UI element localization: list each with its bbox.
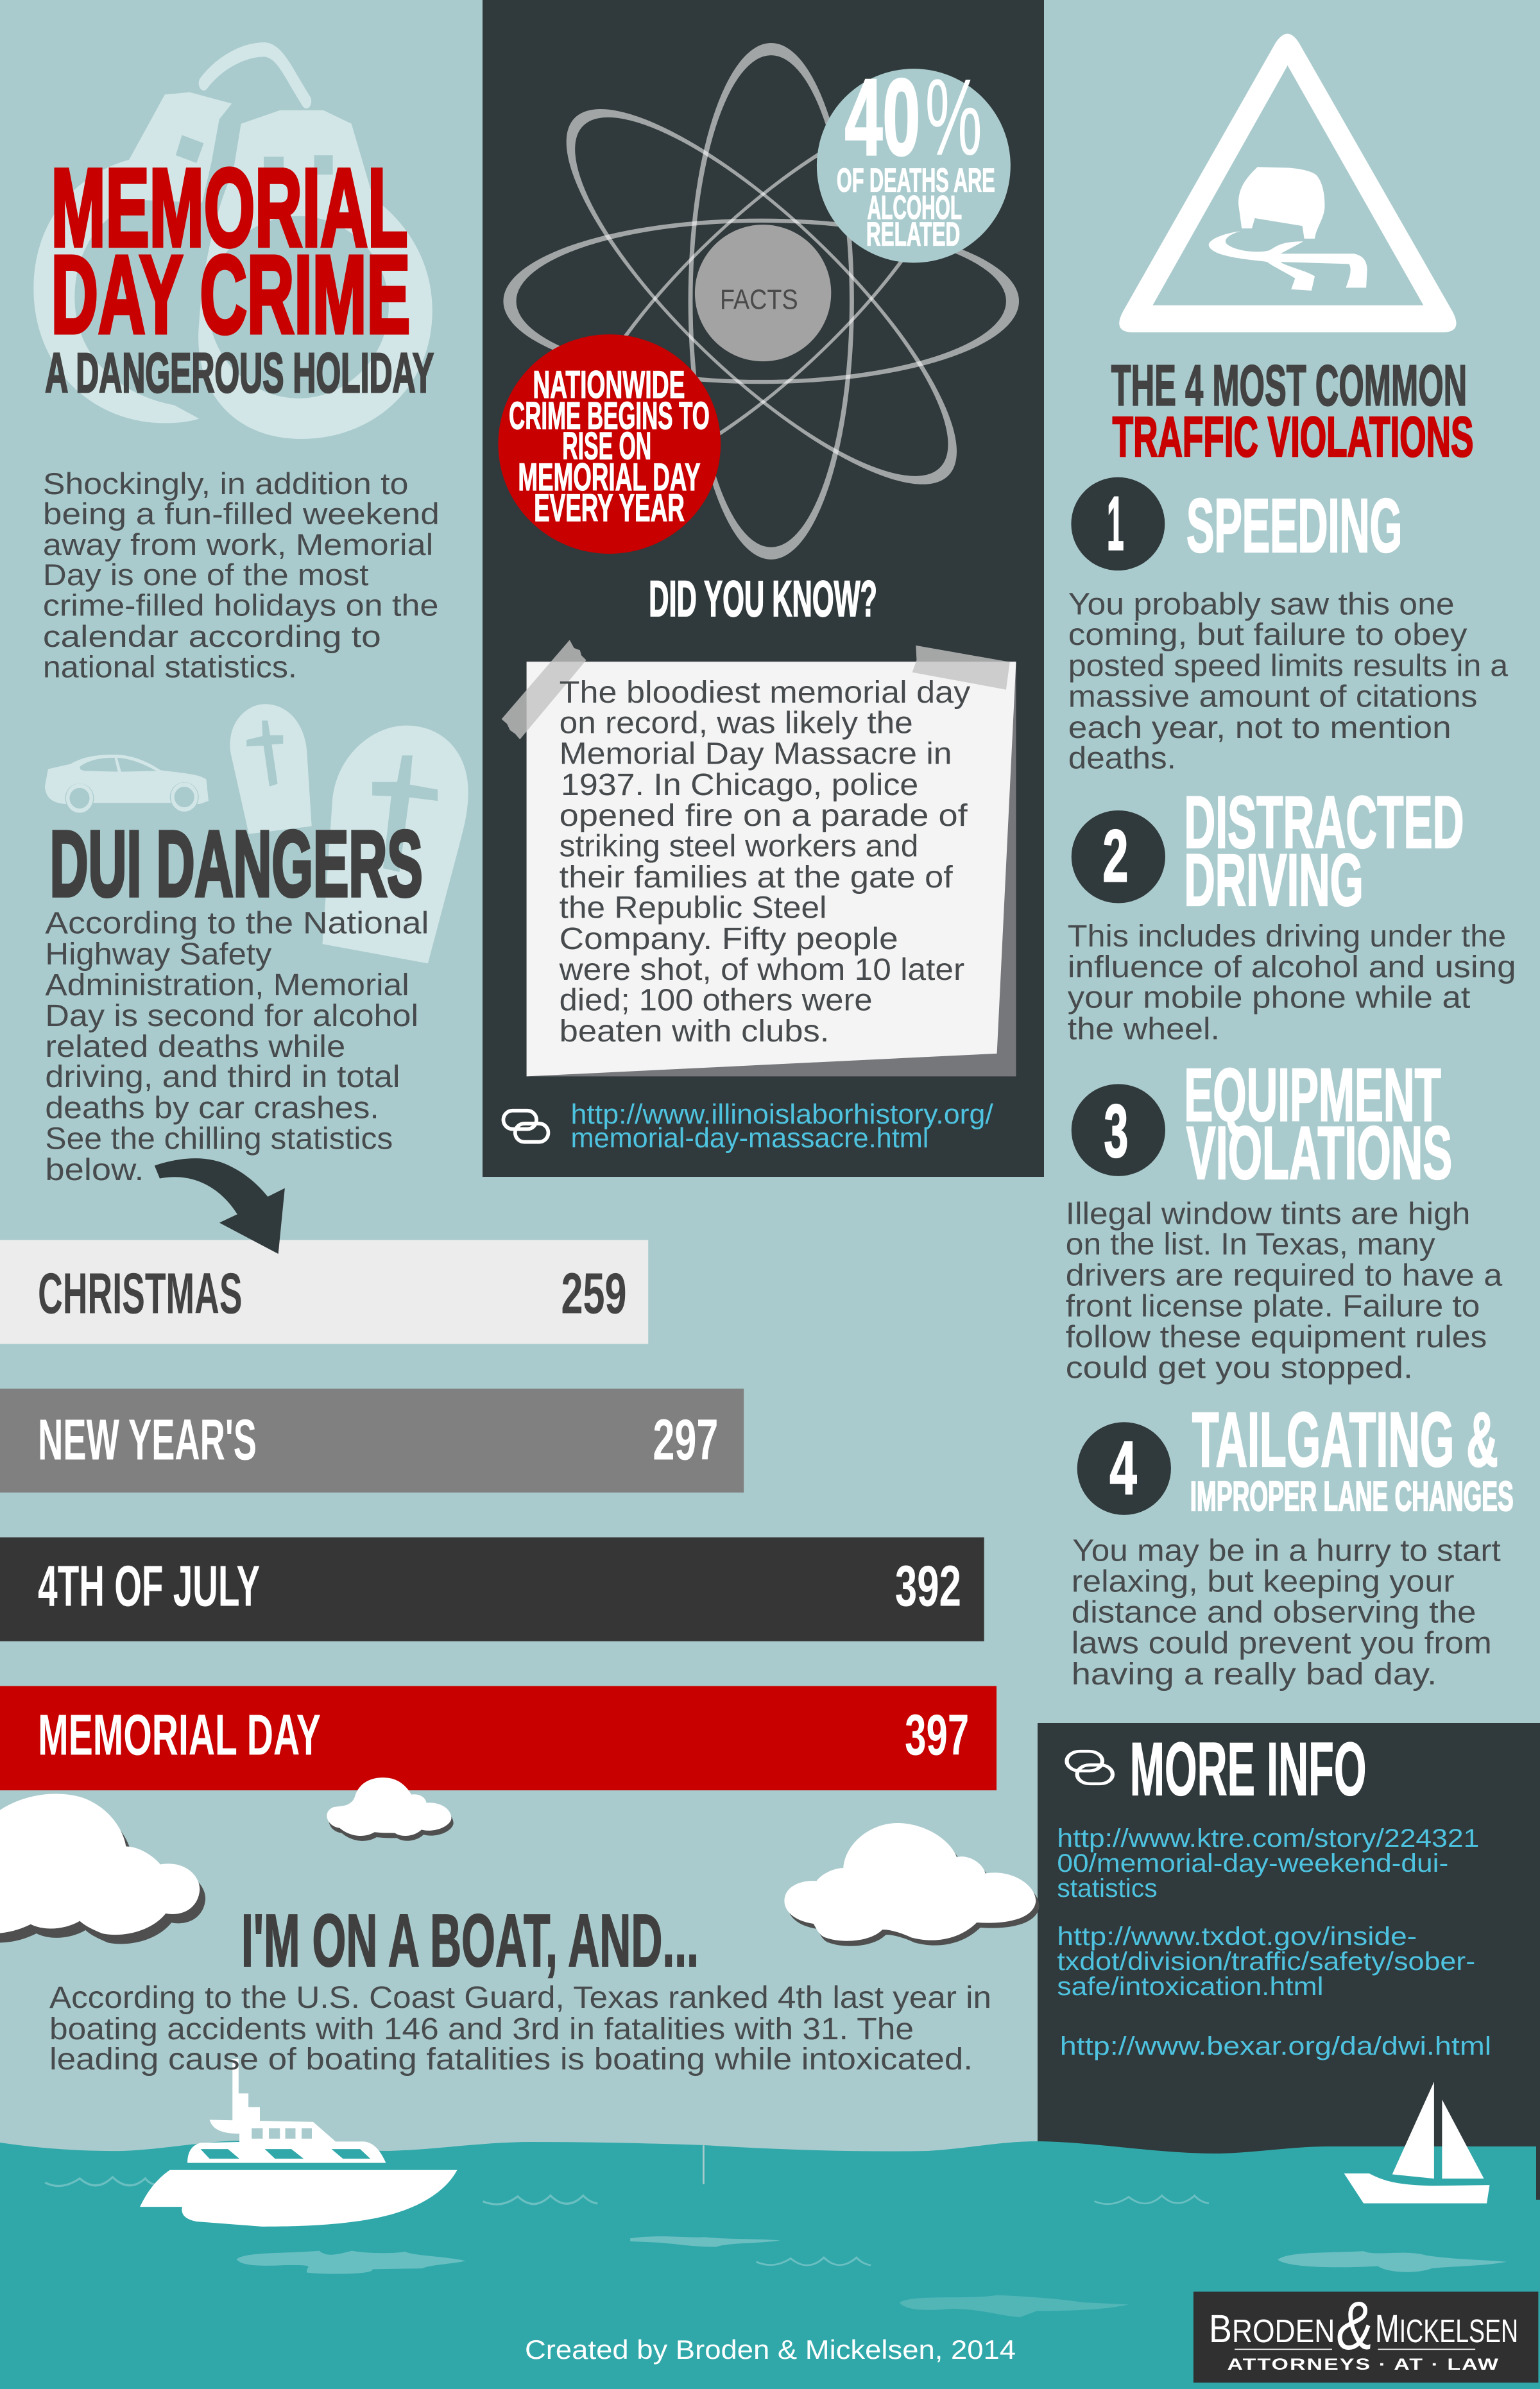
note: bloodiest memorial day xyxy=(502,640,1016,1154)
icon: link xyxy=(503,1111,548,1142)
atom orbits xyxy=(503,43,1019,560)
icon: yacht xyxy=(140,2059,457,2227)
violation 4: tailgating xyxy=(1072,1396,1514,1691)
atom nucleus xyxy=(695,225,831,361)
more info links: http://www.bexar.org/da/dwi.html xyxy=(1060,2032,1491,2060)
callout: nationwide crime: RISE ON xyxy=(562,425,651,468)
DUI text: According to the National xyxy=(45,907,429,941)
note text: 1937. In Chicago, police xyxy=(561,767,918,802)
heading: DUI dangers: DUI DANGERS xyxy=(50,812,423,916)
bar: Christmas: CHRISTMAS xyxy=(38,1262,243,1326)
DUI text: Day is second for alcohol xyxy=(45,999,418,1033)
boating text: boating accidents with 146 and 3rd in fatalities with 31. The xyxy=(49,2012,914,2046)
bar chart: holiday deaths xyxy=(0,1240,997,1790)
note text xyxy=(559,675,970,1049)
bar: Christmas xyxy=(0,1240,648,1344)
intro text: calendar according to xyxy=(43,619,381,654)
DUI text: See the chilling statistics xyxy=(45,1122,393,1156)
logo: & xyxy=(1337,2288,1373,2364)
violation 2: distracted driving: This includes driving under the xyxy=(1068,918,1506,954)
callout: nationwide crime: MEMORIAL DAY xyxy=(518,456,701,499)
more info links: statistics xyxy=(1057,1874,1158,1903)
bar: New Year's: NEW YEAR'S xyxy=(38,1407,257,1471)
violation 1 text: posted speed limits results in a xyxy=(1068,648,1509,683)
violation 1 text: massive amount of citations xyxy=(1068,679,1477,714)
note text: striking steel workers and xyxy=(560,829,918,864)
intro text xyxy=(43,467,440,684)
callout: 40 percent: 40 xyxy=(845,57,920,178)
more info links: 00/memorial-day-weekend-dui- xyxy=(1057,1849,1448,1878)
violation 1: speeding: 1 xyxy=(1107,481,1124,566)
violation 4: tailgating: having a really bad day. xyxy=(1072,1656,1437,1691)
icon: sailboat xyxy=(1344,2082,1489,2204)
icon: small cloud xyxy=(327,1777,454,1841)
violation 3 text: follow these equipment rules xyxy=(1066,1319,1487,1354)
clouds and yacht xyxy=(0,1777,597,2274)
callout: 40 percent xyxy=(817,57,1011,262)
link text: memorial-day-massacre.html xyxy=(570,1123,928,1154)
note tape xyxy=(502,640,1010,739)
violation 1 text: each year, not to mention xyxy=(1068,710,1451,744)
icon: car xyxy=(45,755,209,813)
bar: Christmas: 259 xyxy=(561,1262,627,1326)
bar: 4th of July: 4TH OF JULY xyxy=(38,1554,260,1618)
bar: New Year's xyxy=(0,1389,744,1493)
violation 2: distracted driving: the wheel. xyxy=(1068,1011,1220,1046)
violation 2: distracted driving: 2 xyxy=(1102,815,1128,897)
violation 3 text xyxy=(1066,1196,1503,1385)
DUI text: deaths by car crashes. xyxy=(45,1091,379,1125)
icon: right cloud xyxy=(784,1823,1040,1946)
bar: 4th of July xyxy=(0,1537,984,1641)
violation 2: distracted driving xyxy=(1068,781,1516,1046)
note text: beaten with clubs. xyxy=(560,1014,829,1049)
title: DAY CRIME xyxy=(51,234,410,357)
credit: Created by Broden & Mickelsen, 2014 xyxy=(525,2334,1016,2365)
DUI text: below. xyxy=(45,1153,144,1187)
note text: The bloodiest memorial day xyxy=(560,675,970,710)
heading: on a boat: I'M ON A BOAT, AND... xyxy=(241,1899,699,1982)
violation 3 text: front license plate. Failure to xyxy=(1066,1289,1480,1323)
violation 4: tailgating: You may be in a hurry to start xyxy=(1072,1533,1501,1568)
violation 3 text: on the list. In Texas, many xyxy=(1066,1226,1435,1262)
arrow: to the chart xyxy=(155,1158,285,1254)
violation 4: tailgating: 4 xyxy=(1109,1426,1137,1511)
bar: 4th of July: 392 xyxy=(895,1554,961,1618)
DUI text xyxy=(45,907,429,1187)
violation 1: speeding: SPEEDING xyxy=(1186,483,1402,568)
icon: large cloud xyxy=(0,1794,205,1944)
more info links: safe/intoxication.html xyxy=(1057,1973,1324,2001)
callout: 40 percent: RELATED xyxy=(866,216,960,253)
panel: did you know xyxy=(483,0,1044,1177)
boating text: According to the U.S. Coast Guard, Texas ranked 4th last year in xyxy=(49,1981,991,2015)
violation 4: tailgating: laws could prevent you from xyxy=(1072,1625,1492,1660)
more info links xyxy=(1057,1824,1491,2060)
violation 1 text: You probably saw this one xyxy=(1068,587,1455,621)
bar: Memorial Day: 397 xyxy=(905,1702,969,1767)
more info links: http://www.txdot.gov/inside- xyxy=(1057,1922,1417,1951)
link text xyxy=(570,1099,994,1154)
sea xyxy=(0,2141,1540,2389)
intro text: national statistics. xyxy=(43,650,297,684)
water ripples and puddles xyxy=(45,2177,597,2274)
callout: nationwide crime: CRIME BEGINS TO xyxy=(509,395,710,438)
panel: DUI dangers xyxy=(45,704,468,1187)
DUI text: Highway Safety xyxy=(45,938,272,972)
violation 4: tailgating: distance and observing the xyxy=(1072,1595,1476,1629)
violation 3 text: drivers are required to have a xyxy=(1066,1257,1503,1292)
title xyxy=(51,146,410,357)
callout: 40 percent: ALCOHOL xyxy=(868,190,962,227)
violation 3 text: Illegal window tints are high xyxy=(1066,1196,1470,1231)
link text: http://www.illinoislaborhistory.org/ xyxy=(570,1099,994,1130)
atom nucleus: FACTS xyxy=(720,284,798,315)
boating text xyxy=(49,1981,991,2076)
bar: Memorial Day xyxy=(0,1686,997,1790)
intro text: crime-filled holidays on the xyxy=(43,588,438,622)
logo: BRODEN xyxy=(1209,2307,1335,2350)
intro text: away from work, Memorial xyxy=(43,527,433,561)
DUI text: driving, and third in total xyxy=(45,1060,400,1094)
title: MEMORIAL xyxy=(51,146,407,270)
bar: New Year's: 297 xyxy=(653,1407,718,1471)
callout: nationwide crime xyxy=(498,334,721,554)
note text: Company. Fifty people xyxy=(560,921,898,956)
note text: were shot, of whom 10 later xyxy=(559,952,964,987)
note text: died; 100 others were xyxy=(560,983,873,1018)
violation 3 text: could get you stopped. xyxy=(1066,1350,1413,1385)
logo: ATTORNEYS · AT · LAW xyxy=(1228,2356,1499,2374)
heading: did you know: DID YOU KNOW? xyxy=(649,570,877,627)
note text: on record, was likely the xyxy=(560,705,913,740)
violation 1 text: coming, but failure to obey xyxy=(1068,617,1467,652)
icon: link xyxy=(1067,1751,1113,1784)
note text: their families at the gate of xyxy=(560,860,953,895)
note text: the Republic Steel xyxy=(560,891,826,925)
violation 1 text: deaths. xyxy=(1068,741,1176,775)
panel: header xyxy=(33,49,440,684)
violation 4: tailgating: relaxing, but keeping your xyxy=(1072,1563,1455,1598)
DUI text: related deaths while xyxy=(45,1030,345,1064)
callout: 40 percent: OF DEATHS ARE xyxy=(837,162,995,199)
note text: Memorial Day Massacre in xyxy=(560,737,952,771)
violation 1 text xyxy=(1068,587,1509,775)
right section details xyxy=(630,1727,1538,2383)
intro text: Day is one of the most xyxy=(43,558,369,592)
chart: atom diagram xyxy=(498,43,1019,627)
violation 2: distracted driving: influence of alcohol and using xyxy=(1068,949,1516,984)
icon: large gravestone xyxy=(323,726,468,963)
subtitle: A DANGEROUS HOLIDAY xyxy=(45,341,434,404)
intro text: Shockingly, in addition to xyxy=(43,467,408,501)
icon: handcuffs xyxy=(33,49,432,439)
violation 1: speeding xyxy=(1071,477,1402,570)
intro text: being a fun-filled weekend xyxy=(43,497,440,531)
heading: traffic violations xyxy=(1111,354,1473,468)
violation 3: equipment violations: 3 xyxy=(1104,1090,1128,1173)
callout: 40 percent: % xyxy=(925,57,982,178)
callout: nationwide crime: EVERY YEAR xyxy=(534,486,685,530)
DUI text: Administration, Memorial xyxy=(45,968,409,1002)
water ripples and puddles xyxy=(630,2145,1507,2317)
logo xyxy=(1194,2288,1538,2383)
violation 2: distracted driving: DRIVING xyxy=(1184,839,1364,921)
note text: opened fire on a parade of xyxy=(560,798,968,833)
icon: slippery road warning sign xyxy=(1119,34,1457,332)
panel: more info xyxy=(1038,1723,1540,2211)
icon: small gravestone xyxy=(230,704,312,834)
bar: Memorial Day: MEMORIAL DAY xyxy=(38,1702,321,1767)
callout: nationwide crime: NATIONWIDE xyxy=(533,363,685,407)
boating text: leading cause of boating fatalities is boating while intoxicated. xyxy=(49,2042,973,2076)
violation 3: equipment violations xyxy=(1072,1054,1452,1195)
violation 2: distracted driving: your mobile phone while at xyxy=(1068,980,1471,1015)
